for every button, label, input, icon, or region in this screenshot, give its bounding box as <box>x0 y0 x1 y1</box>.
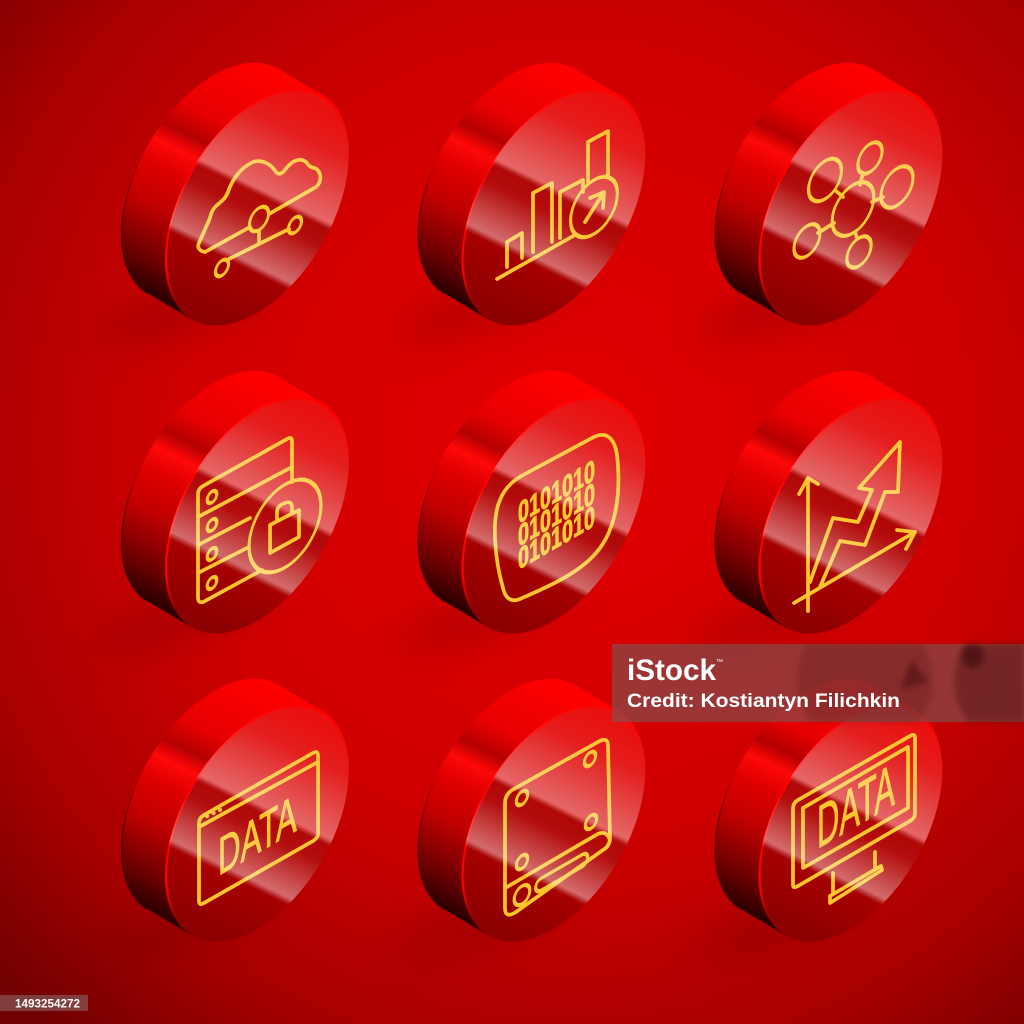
panel: secure server disc <box>95 320 349 674</box>
panel: data window disc <box>95 628 349 982</box>
panel: rising graph disc <box>688 320 942 674</box>
brand name: iStock <box>627 654 716 687</box>
watermark banner <box>612 640 1024 725</box>
icon: monitor with DATA <box>793 735 915 903</box>
panel: binary code disc <box>391 320 645 674</box>
photo credit: Credit: Kostiantyn Filichkin <box>627 690 900 712</box>
banner ghost shapes <box>796 640 1024 725</box>
image id tag: 1493254272 <box>15 996 80 1010</box>
icon: browser window with DATA: DATA <box>218 783 297 888</box>
image id tag <box>0 995 88 1011</box>
icon: server rack with padlock <box>198 438 321 602</box>
icon: axes with rising zigzag arrow <box>794 442 915 611</box>
icon: cloud with network nodes <box>198 160 320 279</box>
icon: browser window with DATA <box>199 752 318 904</box>
icon: monitor with DATA: DATA <box>817 750 895 862</box>
icon: solid state drive <box>505 740 610 915</box>
icon: binary code in rounded frame <box>495 435 618 600</box>
icon: binary code in rounded frame: 0101010 <box>518 499 595 577</box>
trademark: ™ <box>716 659 723 666</box>
panel: hard drive disc <box>391 628 645 982</box>
icon: bar chart with arrow circle <box>497 131 617 279</box>
icon: binary code in rounded frame: 0101010 <box>518 476 595 554</box>
panel: data monitor disc <box>688 628 942 982</box>
panel: growth chart disc <box>391 12 645 366</box>
panel: cloud network disc <box>95 12 349 366</box>
icon: binary code in rounded frame: 0101010 <box>518 453 595 531</box>
panel: hub network disc <box>688 12 942 366</box>
icon: hub and spoke network <box>794 137 913 273</box>
